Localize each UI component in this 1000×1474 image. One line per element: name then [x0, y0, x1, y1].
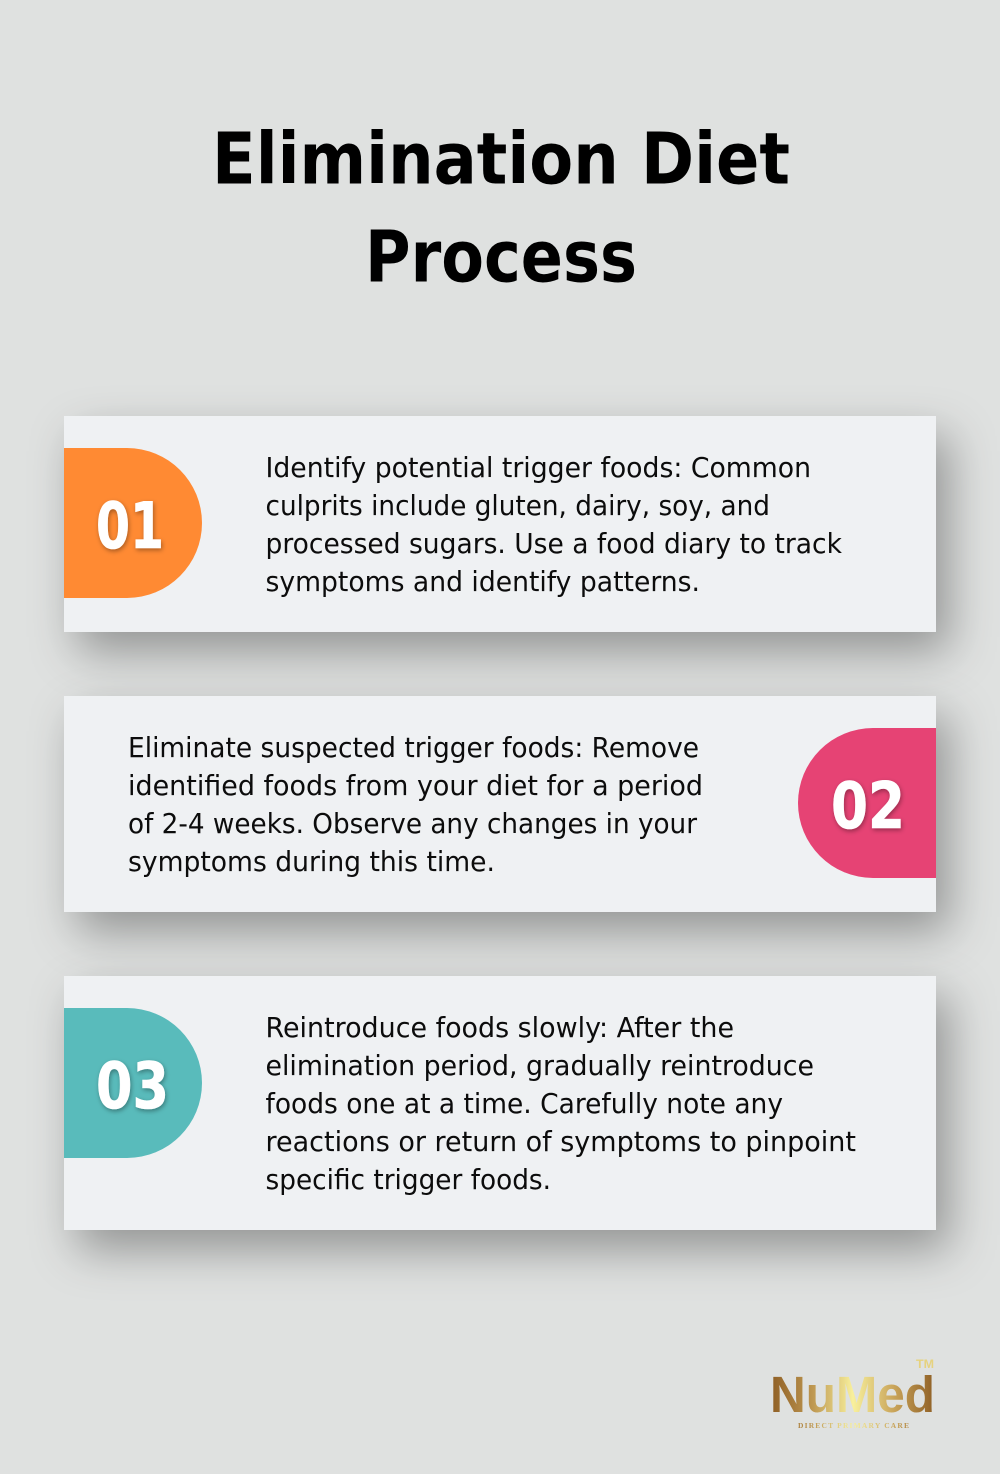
text: step 02	[128, 731, 703, 878]
text: step 03	[266, 1011, 856, 1196]
text: step 01: processed sugars. Use a food diary to track	[266, 527, 843, 560]
panel: step 03	[64, 976, 936, 1230]
text: step 02: Eliminate suspected trigger foods: Remove	[128, 731, 699, 764]
card background 01	[64, 416, 936, 632]
text: step 03: reactions or return of symptoms to pinpoint	[266, 1125, 856, 1158]
card background 03	[64, 976, 936, 1230]
logo: NuMed: NuMed	[770, 1366, 935, 1423]
title: Elimination Diet	[212, 118, 790, 200]
badge: 01: 01	[96, 490, 164, 564]
panel: step 02	[64, 696, 936, 912]
text: step 02: of 2-4 weeks. Observe any changes in your	[128, 807, 697, 840]
title: Process	[365, 216, 637, 298]
panel: step 01	[64, 416, 936, 632]
card background 02	[64, 696, 936, 912]
logo: NuMed: DIRECT PRIMARY CARE	[798, 1421, 909, 1430]
text: step 03: elimination period, gradually reintroduce	[266, 1049, 814, 1082]
badge: 02: 02	[831, 770, 905, 844]
text: step 01: Identify potential trigger foods: Common	[266, 451, 811, 484]
text: step 03: Reintroduce foods slowly: After the	[266, 1011, 734, 1044]
badge: 03: 03	[96, 1050, 169, 1124]
badge: 03	[64, 1008, 202, 1158]
text: step 01: symptoms and identify patterns.	[266, 565, 700, 598]
text: step 01: culprits include gluten, dairy, soy, and	[266, 489, 770, 522]
title	[212, 118, 790, 298]
badge: 01	[64, 448, 202, 598]
text: step 01	[266, 451, 843, 598]
text: step 03: specific trigger foods.	[266, 1163, 551, 1196]
text: step 02: symptoms during this time.	[128, 845, 495, 878]
logo: NuMed: TM	[916, 1357, 934, 1371]
text: step 03: foods one at a time. Carefully note any	[266, 1087, 783, 1120]
text: step 02: identified foods from your diet for a period	[128, 769, 703, 802]
badge: 02	[798, 728, 936, 878]
